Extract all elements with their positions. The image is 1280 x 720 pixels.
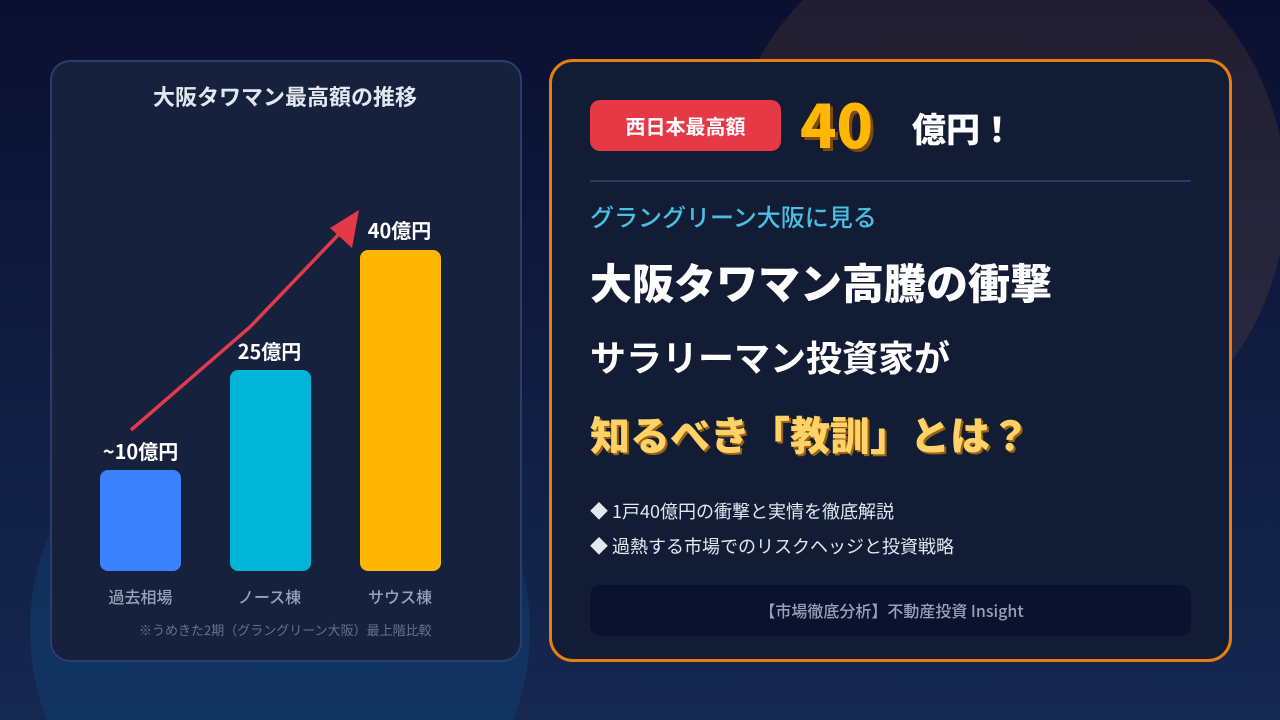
bullet 1: ◆ 1戸40億円の衝撃と実情を徹底解説: [590, 498, 894, 524]
divider: [590, 180, 1191, 182]
footnote: ※うめきた2期（グラングリーン大阪）最上階比較: [139, 620, 432, 639]
headline line 3: 知るべき「教訓」とは？: [590, 404, 1030, 462]
footer tag: 【市場徹底分析】不動産投資 Insight: [759, 598, 1024, 622]
value label: ~10億円: ~10億円: [103, 436, 178, 465]
subtitle: グラングリーン大阪に見る: [590, 198, 877, 233]
badge: 西日本最高額: [590, 100, 781, 151]
panel: chart: [50, 60, 522, 662]
chart title: 大阪タワマン最高額の推移: [153, 80, 417, 112]
bar: サウス棟: [360, 250, 441, 571]
category label: ノース棟: ノース棟: [238, 584, 301, 608]
bullet 2: ◆ 過熱する市場でのリスクヘッジと投資戦略: [590, 533, 954, 559]
background circle: bottom left: [30, 380, 530, 720]
unit: 億円！: 億円！: [912, 103, 1014, 152]
category label: 過去相場: 過去相場: [108, 584, 172, 608]
value label: 25億円: 25億円: [238, 336, 301, 365]
headline line 2: サラリーマン投資家が: [590, 330, 950, 382]
badge: 西日本最高額: 西日本最高額: [626, 111, 746, 140]
value label: 40億円: 40億円: [368, 215, 431, 244]
footer tag: [590, 585, 1191, 636]
bar: ノース棟: [230, 370, 311, 571]
background circle: top right: [724, 0, 1280, 476]
bar: 過去相場: [100, 470, 181, 571]
big number: 40: 40: [800, 79, 873, 166]
panel: headline: [549, 59, 1232, 662]
category label: サウス棟: サウス棟: [368, 584, 432, 608]
headline line 1: 大阪タワマン高騰の衝撃: [590, 251, 1052, 312]
